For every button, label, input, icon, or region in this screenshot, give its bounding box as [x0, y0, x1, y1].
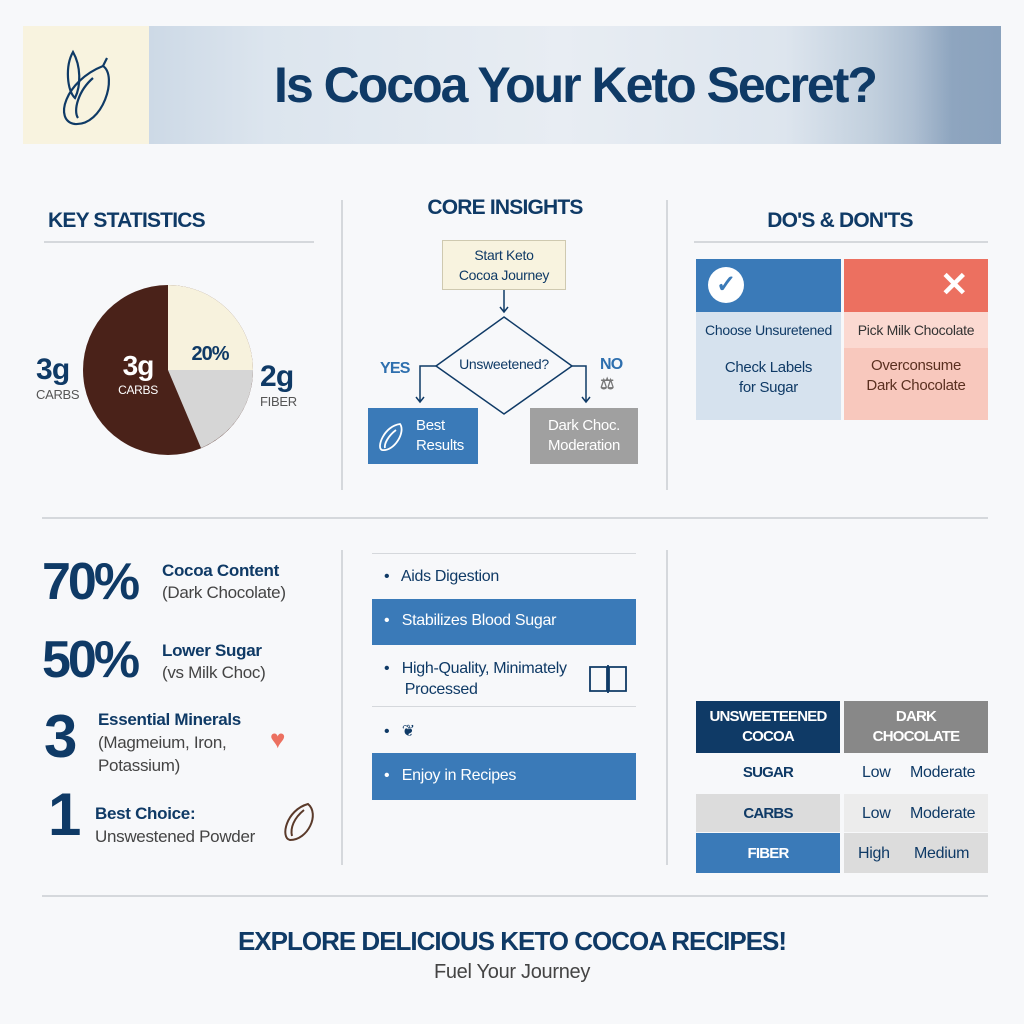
- stat: 2g fiber: FIBER: [260, 394, 297, 409]
- panel: big numbers: Potassium): [98, 756, 180, 775]
- do column: Choose Unsuretened: [705, 322, 832, 338]
- item: stabilizes blood sugar: • Stabilizes Blood Sugar: [384, 612, 556, 629]
- heading: KEY STATISTICS: [48, 209, 205, 232]
- flow: start box: [442, 240, 566, 290]
- stat 70%: 70%: [42, 553, 137, 611]
- footer call to action: [238, 926, 786, 983]
- comparison table: Low: [862, 764, 890, 781]
- do column: ✓: [716, 271, 736, 298]
- item: high quality: [384, 660, 567, 698]
- panel: big numbers: [42, 553, 314, 848]
- comparison table: COCOA: [742, 728, 794, 745]
- do column: Check Labels: [725, 359, 812, 376]
- flow: moderation: Moderation: [548, 437, 620, 454]
- panel: do's & don'ts: [694, 209, 988, 420]
- flowchart connectors: [416, 290, 590, 415]
- header banner: [23, 26, 1001, 144]
- flow: start box: Start Keto: [474, 247, 534, 263]
- flow: moderation: [530, 408, 638, 464]
- panel: big numbers: Essential Minerals: [98, 710, 241, 729]
- don't column: Pick Milk Chocolate: [858, 322, 974, 338]
- comparison table: High: [858, 845, 890, 862]
- title: Is Cocoa Your Keto Secret?: [274, 57, 876, 113]
- comparison table: Medium: [914, 845, 969, 862]
- heading: DO'S & DON'TS: [767, 209, 913, 232]
- do column: for Sugar: [739, 379, 798, 396]
- do column: [696, 259, 841, 420]
- YES label: YES: [380, 360, 410, 377]
- panel: key statistics: [36, 209, 314, 455]
- panel: big numbers: Cocoa Content: [162, 561, 279, 580]
- stat: 3g carbs: [36, 353, 79, 402]
- comparison table: [696, 701, 988, 873]
- flow: best results: [368, 408, 478, 464]
- NO label: NO: [600, 356, 622, 373]
- footer call to action: Fuel Your Journey: [434, 961, 590, 983]
- flow: best results: Results: [416, 437, 464, 454]
- comparison table: FIBER: [747, 845, 788, 862]
- stat: 2g fiber: 2g: [260, 360, 293, 393]
- icon: cocoa pod: [23, 26, 149, 144]
- comparison table: Moderate: [910, 764, 975, 781]
- don't column: Overconsume: [871, 357, 961, 374]
- icon: book: [589, 665, 627, 693]
- NO label: ⚖: [600, 376, 614, 393]
- stat: 3g carbs: CARBS: [36, 387, 79, 402]
- pie chart: CARBS: [118, 383, 158, 397]
- comparison table: DARK: [896, 708, 936, 725]
- stat: 3g carbs: 3g: [36, 353, 69, 386]
- item: enjoy in recipes: [372, 753, 636, 800]
- flow: best results: Best: [416, 417, 445, 434]
- comparison table: UNSWEETEENED: [709, 708, 827, 725]
- comparison table: Low: [862, 805, 890, 822]
- pie chart: 20%: [191, 343, 230, 365]
- don't column: Dark Chocolate: [866, 377, 966, 394]
- stat 1: 1: [48, 781, 81, 848]
- comparison table: Moderate: [910, 805, 975, 822]
- comparison table: SUGAR: [743, 764, 793, 781]
- panel: big numbers: (Magmeium, Iron,: [98, 733, 226, 752]
- heading: CORE INSIGHTS: [427, 196, 583, 219]
- flow: start box: Cocoa Journey: [459, 267, 549, 283]
- panel: big numbers: Best Choice:: [95, 804, 195, 823]
- NO label: [600, 356, 622, 393]
- item: enjoy in recipes: • Enjoy in Recipes: [384, 767, 516, 784]
- icon: heart: ♥: [270, 724, 285, 754]
- stat 50%: 50%: [42, 631, 137, 689]
- item: high quality: • High-Quality, Minimately: [384, 660, 567, 677]
- item: stabilizes blood sugar: [372, 599, 636, 645]
- flow: moderation: Dark Choc.: [548, 417, 620, 434]
- item: high quality: Processed: [405, 681, 478, 698]
- icon: cocoa bean: [284, 802, 314, 841]
- stat: 2g fiber: [260, 360, 297, 409]
- panel: big numbers: Unswestened Powder: [95, 827, 255, 846]
- pie chart: 3g: [123, 350, 153, 381]
- pie chart: [83, 285, 253, 455]
- panel: core insights flowchart: [368, 196, 638, 464]
- diamond label: Unsweetened?: [459, 356, 549, 372]
- don't column: [844, 259, 988, 420]
- stat 3: 3: [44, 703, 77, 770]
- don't column: ✕: [940, 266, 968, 304]
- footer call to action: EXPLORE DELICIOUS KETO COCOA RECIPES!: [238, 926, 786, 956]
- item: aids digestion: • Aids Digestion: [384, 568, 499, 585]
- panel: big numbers: (Dark Chocolate): [162, 583, 286, 602]
- comparison table: CARBS: [743, 805, 793, 822]
- panel: big numbers: Lower Sugar: [162, 641, 262, 660]
- panel: benefits list: [372, 553, 636, 800]
- panel: big numbers: (vs Milk Choc): [162, 663, 265, 682]
- item: leaf: • ❦: [384, 723, 415, 740]
- comparison table: CHOCOLATE: [873, 728, 959, 745]
